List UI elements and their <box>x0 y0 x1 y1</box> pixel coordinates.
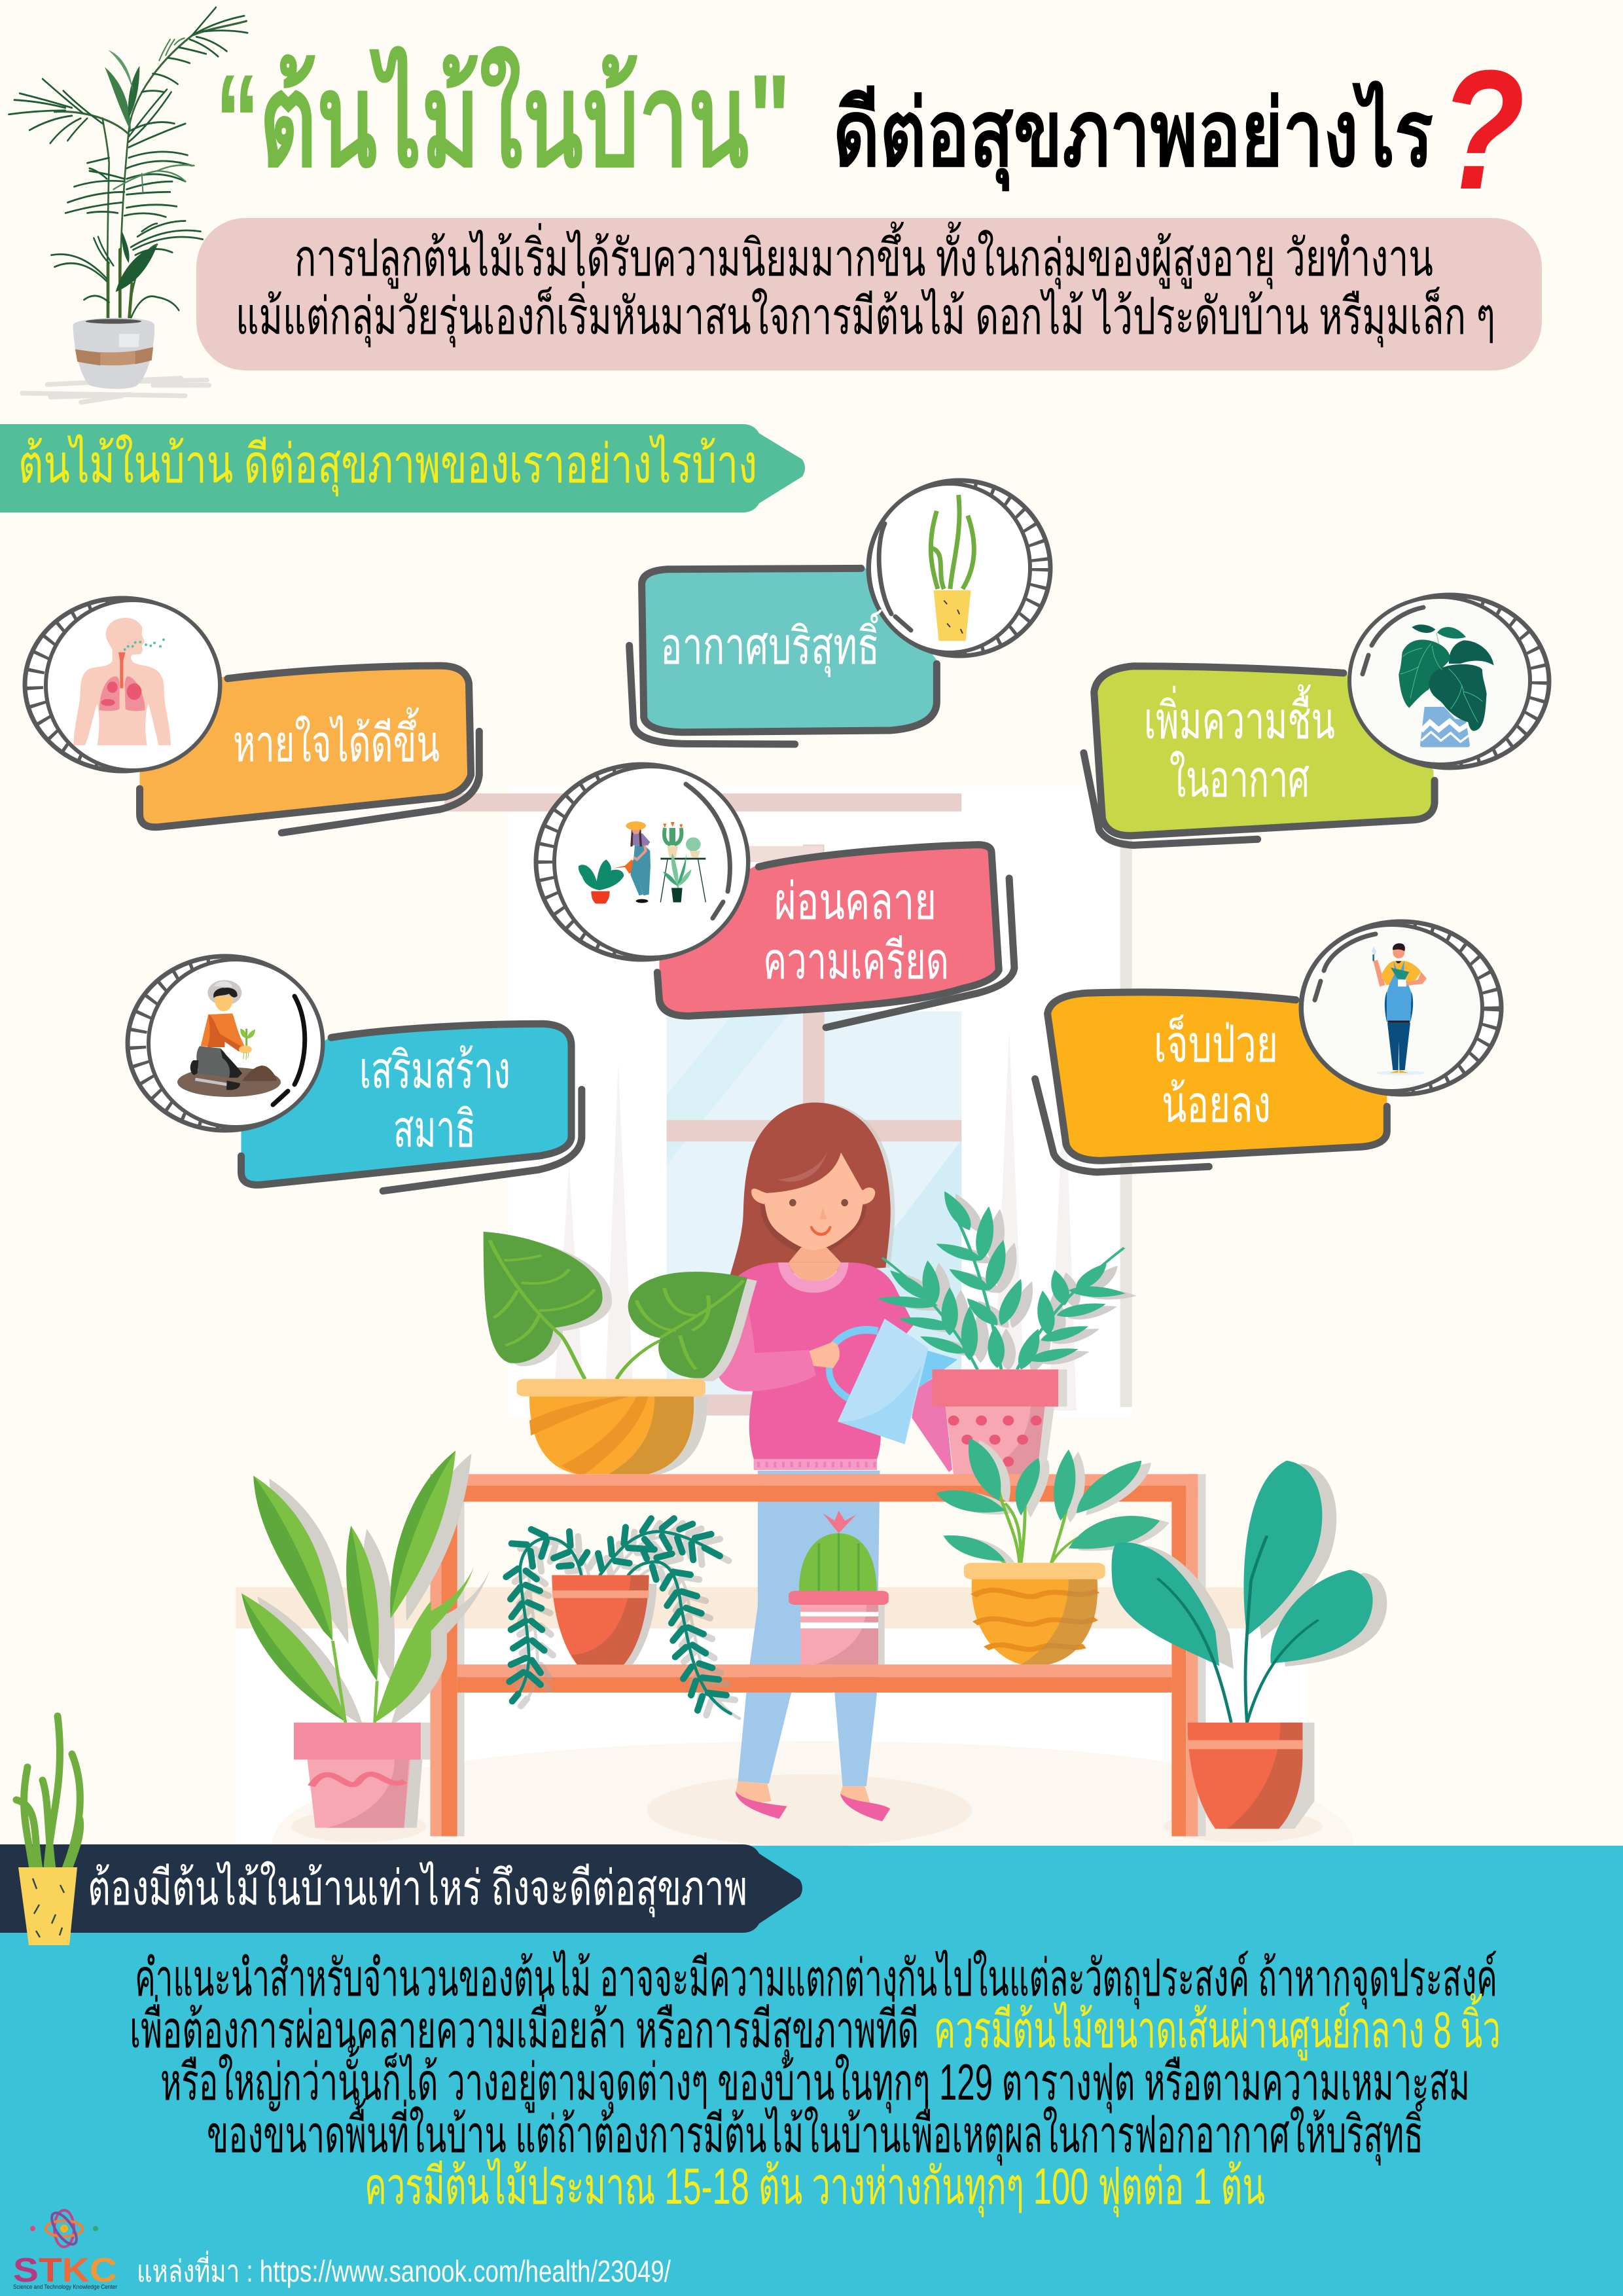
banner text: ต้องมีต้นไม้ในบ้านเท่าไหร่ ถึงจะดีต่อสุขภาพ <box>88 1861 747 1918</box>
icon: person planting <box>177 980 281 1097</box>
intro pill <box>196 218 1542 370</box>
logo: wordmark: STKC <box>13 2251 117 2289</box>
badge ring <box>1349 595 1549 768</box>
card body <box>1084 666 1435 845</box>
palm central blades <box>105 50 157 292</box>
title: red question mark: ? <box>1440 35 1525 225</box>
table <box>430 1474 1198 1837</box>
room: wall, floor, window <box>236 786 1354 1849</box>
title: green phrase: “ต้นไม้ในบ้าน" <box>215 45 791 194</box>
palm fronds <box>9 7 247 319</box>
title <box>215 35 1525 225</box>
cactus <box>789 1511 889 1664</box>
icon: potted snake plant on banner <box>16 1716 80 1945</box>
plants and table <box>241 1189 1387 1837</box>
label: sickness line 1: เจ็บป่วย <box>1154 1014 1278 1073</box>
card body <box>140 666 479 833</box>
banner text: ต้นไม้ในบ้าน ดีต่อสุขภาพของเราอย่างไรบ้าง <box>18 435 757 497</box>
icon: gardener with plants <box>579 821 705 904</box>
card: reduce stress <box>536 764 1014 1028</box>
logo: atom mark <box>30 2209 98 2248</box>
label: more humidity line 2: ในอากาศ <box>1169 750 1310 808</box>
snake plant in pink pot <box>241 1450 490 1828</box>
logo <box>13 2209 117 2290</box>
hanging vine in red pot <box>506 1518 740 1719</box>
card body <box>630 568 936 744</box>
bottom panel <box>0 1846 1623 2296</box>
card: build concentration <box>128 956 582 1191</box>
leafy plant in yellow pot <box>936 1438 1169 1664</box>
label: more humidity line 1: เพิ่มความชื้น <box>1144 684 1335 749</box>
label: sickness line 2: น้อยลง <box>1162 1075 1271 1133</box>
body paragraph <box>130 1949 1501 2217</box>
big leaf plant on table <box>484 1232 757 1474</box>
girl: legs <box>736 1471 890 1821</box>
label: breathe better: หายใจได้ดีขึ้น <box>233 707 440 772</box>
logo: tagline: Science and Technology Knowledge Center <box>13 2284 117 2290</box>
badge ring <box>25 598 220 771</box>
section banner: how many plants <box>0 1844 802 1933</box>
section banner: health <box>0 424 805 512</box>
card: breathe better <box>25 598 479 833</box>
card: less sickness <box>1035 922 1501 1172</box>
large teal plant in red pot <box>1112 1461 1387 1829</box>
label: concentration line 1: เสริมสร้าง <box>359 1041 510 1099</box>
label: relax line 1: ผ่อนคลาย <box>774 872 936 930</box>
palm floor shadow <box>22 378 209 403</box>
card body <box>241 1024 582 1191</box>
source credit: แหล่งที่มา : https://www.sanook.com/health/23049/ <box>137 2250 671 2288</box>
icon: gardener in apron <box>1372 943 1427 1075</box>
card body <box>657 845 1014 1028</box>
icon: lungs <box>73 618 171 745</box>
card body <box>1035 992 1387 1172</box>
badge ring <box>1301 922 1501 1094</box>
label: relax line 2: ความเครียด <box>763 932 949 990</box>
badge ring <box>536 764 748 960</box>
top-left palm plant <box>9 7 247 403</box>
card: clean air <box>630 480 1050 744</box>
icon: snake plant <box>929 495 974 641</box>
scene: room with girl watering plants <box>236 786 1387 1849</box>
label: concentration line 2: สมาธิ <box>393 1100 476 1158</box>
girl: upper body <box>715 1103 957 1472</box>
badge ring <box>868 480 1050 656</box>
card: more humidity <box>1084 595 1549 845</box>
body line 2 black: เพื่อต้องการผ่อนคลายความเมื่อยล้า หรือการมีสุขภาพที่ดี <box>130 1995 919 2061</box>
card labels <box>233 609 1335 1158</box>
badge ring <box>128 956 323 1130</box>
benefit cards <box>25 480 1549 1191</box>
icon: potted leaves <box>1399 624 1494 747</box>
palm pot <box>73 318 154 389</box>
title: black phrase: ดีต่อสุขภาพอย่างไร <box>833 81 1433 192</box>
fern in polka-dot pot <box>876 1189 1137 1476</box>
label: clean air: อากาศบริสุทธิ์ <box>660 609 883 677</box>
